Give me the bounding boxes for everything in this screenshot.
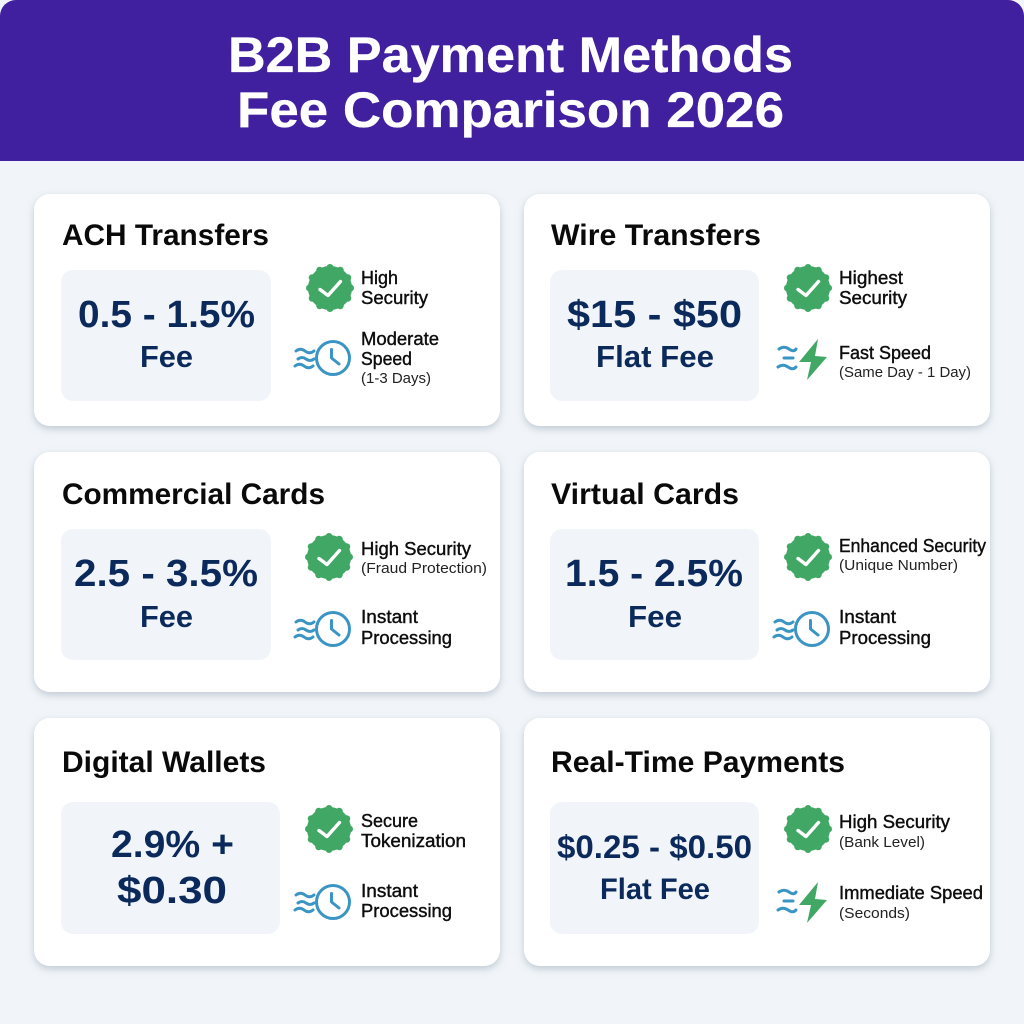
fee box: Commercial: Fee [140, 599, 193, 634]
panel: Virtual Cards [524, 452, 990, 692]
title [228, 27, 793, 138]
title: B2B Payment Methods [228, 27, 793, 83]
fee box: Commercial [61, 529, 271, 660]
security label: High Security [839, 812, 950, 832]
panel: Wire Transfers: Wire Transfers [551, 219, 761, 252]
security label: Security [839, 288, 907, 308]
panel: Real-Time Payments [524, 718, 990, 966]
speed label: Fast Speed [839, 343, 931, 363]
icon: clock [295, 612, 350, 646]
speed label [361, 881, 452, 921]
security label [361, 811, 466, 851]
speed label: Instant [361, 607, 418, 627]
fee box: Wire: Flat Fee [596, 339, 714, 374]
title: Fee Comparison 2026 [237, 82, 784, 138]
panel: Commercial Cards: Commercial Cards [62, 478, 325, 511]
icon: lightning bolt [778, 882, 827, 923]
fee box: ACH: 0.5 - 1.5% [78, 294, 255, 336]
panel: Real-Time Payments: Real-Time Payments [551, 746, 845, 779]
security label [839, 536, 986, 574]
fee box: Virtual: 1.5 - 2.5% [565, 553, 743, 595]
fee box: Wire [550, 270, 759, 401]
header banner [0, 0, 1024, 161]
security label: Secure [361, 811, 418, 831]
speed label: (1-3 Days) [361, 371, 431, 387]
fee box: Wire: $15 - $50 [567, 294, 742, 336]
fee box: Real-Time: $0.25 - $0.50 [557, 829, 752, 865]
security label: Enhanced Security [839, 536, 986, 556]
icon: security badge [306, 264, 354, 312]
panel: Digital Wallets: Digital Wallets [62, 746, 266, 779]
panel: Commercial Cards [34, 452, 500, 692]
fee box: Digital Wallets: 2.9% + [111, 824, 234, 866]
speed label [361, 607, 452, 648]
security label: (Fraud Protection) [361, 561, 487, 577]
icon: clock [774, 612, 828, 646]
security label [361, 268, 428, 308]
speed label: Processing [361, 628, 452, 648]
speed label [839, 883, 983, 922]
speed label: Processing [839, 628, 931, 648]
speed label: Processing [361, 901, 452, 921]
security label: High [361, 268, 398, 288]
security label [361, 539, 487, 577]
fee box: ACH [61, 270, 271, 401]
panel: Virtual Cards: Virtual Cards [551, 478, 739, 511]
panel: Wire Transfers [524, 194, 990, 426]
speed label: Instant [361, 881, 418, 901]
speed label [839, 607, 931, 648]
icon: security badge [784, 805, 832, 853]
security label: (Unique Number) [839, 558, 958, 574]
speed label [361, 329, 439, 387]
security label [839, 268, 907, 308]
fee box: Virtual: Fee [628, 599, 682, 634]
security label: Tokenization [361, 831, 466, 851]
fee box: Real-Time: Flat Fee [600, 873, 710, 906]
fee box: Digital Wallets: $0.30 [117, 870, 227, 912]
icon: clock [295, 886, 350, 918]
fee box: Commercial: 2.5 - 3.5% [74, 553, 258, 595]
panel: Digital Wallets [34, 718, 500, 966]
icon: security badge [305, 533, 353, 581]
security label [839, 812, 950, 851]
fee box: Virtual [550, 529, 759, 660]
security label: (Bank Level) [839, 835, 925, 851]
speed label: Instant [839, 607, 896, 627]
panel: ACH Transfers: ACH Transfers [62, 219, 269, 252]
security label: Highest [839, 268, 903, 288]
icon: security badge [305, 805, 353, 853]
speed label: Speed [361, 349, 412, 369]
speed label [839, 343, 971, 381]
fee box: Digital Wallets [61, 802, 280, 934]
icon: security badge [784, 264, 832, 312]
fee box: ACH: Fee [140, 339, 193, 374]
speed label: Immediate Speed [839, 883, 983, 903]
icon: security badge [784, 533, 832, 581]
icon: clock [295, 342, 350, 374]
panel: ACH Transfers [34, 194, 500, 426]
security label: High Security [361, 539, 471, 559]
security label: Security [361, 288, 428, 308]
icon: lightning bolt [778, 339, 827, 380]
speed label: Moderate [361, 329, 439, 349]
speed label: (Seconds) [839, 906, 910, 922]
fee box: Real-Time [550, 802, 759, 934]
speed label: (Same Day - 1 Day) [839, 365, 971, 381]
